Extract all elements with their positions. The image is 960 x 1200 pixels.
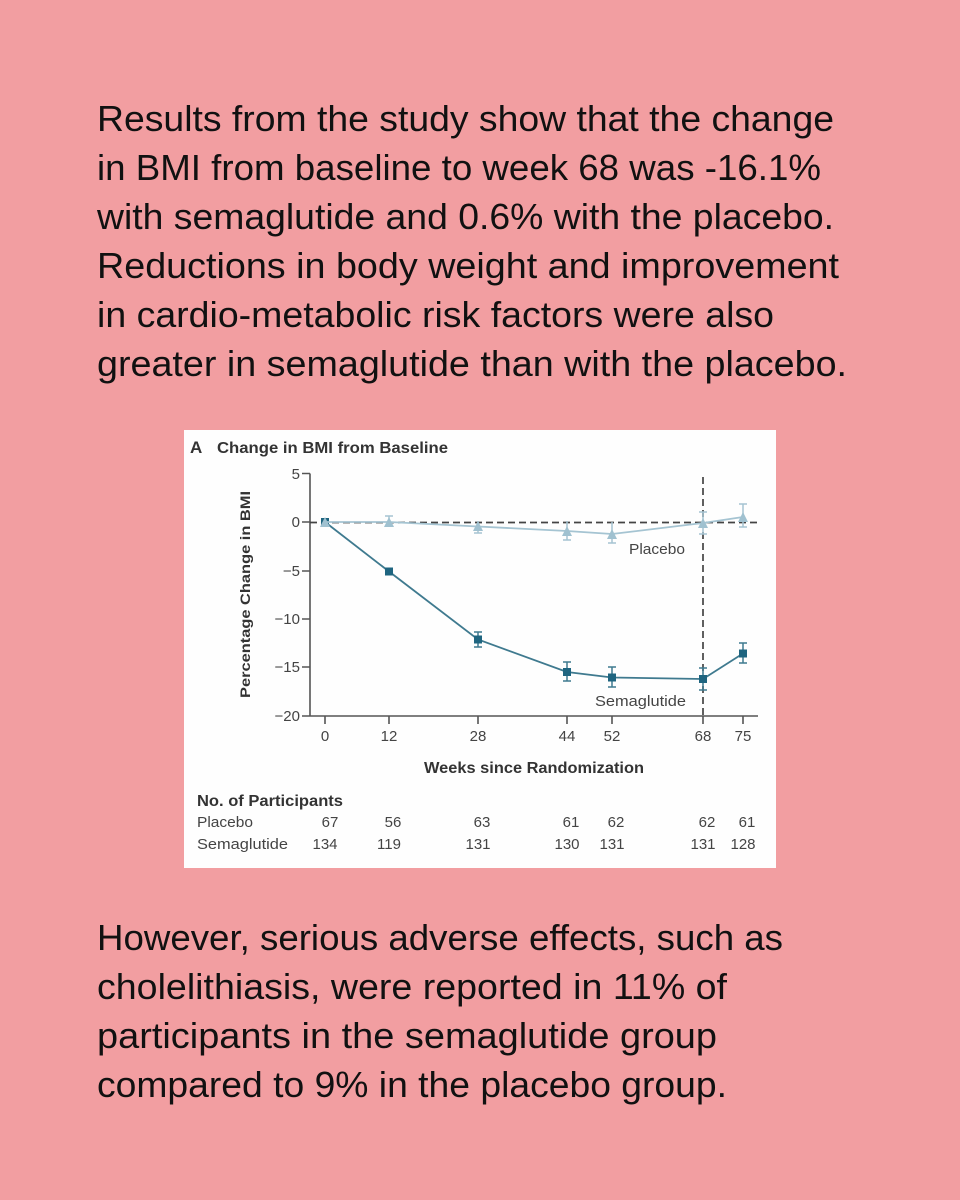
y axis: −5 — [283, 563, 300, 580]
table: number of participants: No. of Participants — [197, 793, 343, 810]
table: number of participants: Semaglutide — [197, 836, 288, 853]
y axis: −10 — [275, 611, 300, 628]
table: number of participants: 63 — [474, 814, 490, 831]
text block: study results: Results from the study show that the change — [97, 98, 834, 139]
table: number of participants: 61 — [563, 814, 579, 831]
table: number of participants: 61 — [739, 814, 755, 831]
text block: adverse effects — [97, 917, 783, 1105]
text block: adverse effects: compared to 9% in the placebo group. — [97, 1064, 727, 1105]
text block: adverse effects: However, serious adverse effects, such as — [97, 917, 783, 958]
table: number of participants: 62 — [699, 814, 715, 831]
table: number of participants: 56 — [385, 814, 401, 831]
text block: study results: in cardio-metabolic risk factors were also — [97, 294, 774, 335]
text block: study results: with semaglutide and 0.6% with the placebo. — [96, 196, 834, 237]
table: number of participants: Placebo — [197, 814, 253, 831]
series: placebo — [320, 504, 748, 543]
text block: study results: Reductions in body weight and improvement — [97, 245, 839, 286]
y axis title: Percentage Change in BMI — [237, 491, 253, 698]
x axis labels: 12 — [381, 728, 397, 745]
text block: study results: greater in semaglutide than with the placebo. — [97, 343, 847, 384]
y axis: −20 — [275, 708, 300, 725]
chart heading: Change in BMI from Baseline — [217, 440, 448, 457]
series label: semaglutide: Semaglutide — [595, 693, 686, 710]
table: number of participants — [197, 793, 756, 853]
reference lines — [310, 477, 758, 716]
x axis labels: 75 — [735, 728, 751, 745]
table: number of participants: 130 — [554, 836, 580, 853]
chart heading: A — [190, 438, 202, 457]
x axis title: Weeks since Randomization — [424, 760, 644, 777]
x axis labels — [321, 728, 751, 745]
text block: adverse effects: cholelithiasis, were reported in 11% of — [97, 966, 728, 1007]
y axis — [275, 466, 758, 725]
table: number of participants: 62 — [608, 814, 624, 831]
panel: BMI chart figure — [184, 430, 776, 868]
table: number of participants: 131 — [690, 836, 716, 853]
table: number of participants: 119 — [377, 836, 401, 853]
y axis: −15 — [275, 659, 300, 676]
table: number of participants: 67 — [322, 814, 338, 831]
x axis labels: 52 — [604, 728, 620, 745]
x axis labels: 0 — [321, 728, 329, 745]
table: number of participants: 128 — [730, 836, 756, 853]
x axis labels: 28 — [470, 728, 486, 745]
table: number of participants: 131 — [599, 836, 625, 853]
x axis labels: 68 — [695, 728, 711, 745]
y axis: 0 — [292, 514, 300, 531]
x axis labels: 44 — [559, 728, 575, 745]
table: number of participants: 134 — [312, 836, 338, 853]
series: semaglutide — [321, 518, 747, 690]
text block: adverse effects: participants in the semaglutide group — [97, 1015, 717, 1056]
y axis: 5 — [292, 466, 300, 483]
text block: study results — [96, 98, 847, 384]
table: number of participants: 131 — [465, 836, 491, 853]
series label: placebo: Placebo — [629, 541, 685, 558]
text block: study results: in BMI from baseline to week 68 was -16.1% — [97, 147, 821, 188]
